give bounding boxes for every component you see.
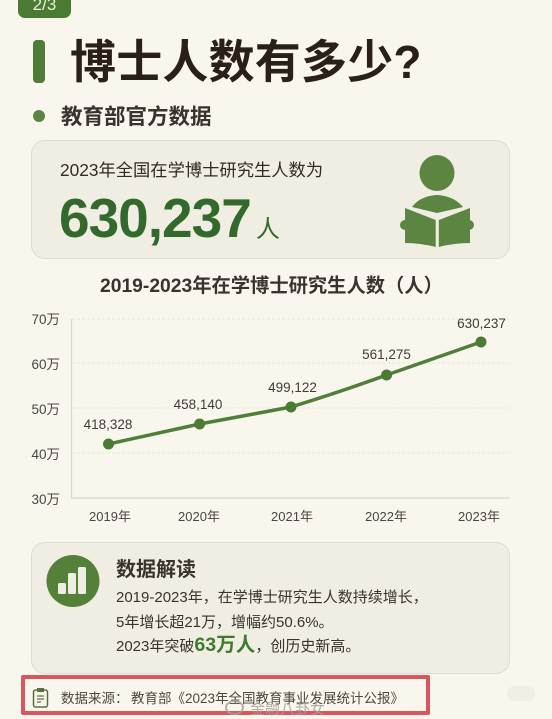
interpretation text — [116, 589, 428, 656]
y axis labels: 60万 — [31, 357, 60, 372]
x axis labels: 2023年 — [458, 509, 500, 524]
y axis labels: 70万 — [31, 312, 60, 327]
watermark: 金融八卦女 — [250, 701, 325, 718]
data labels: 418,328 — [84, 417, 132, 432]
y axis labels: 50万 — [31, 402, 60, 417]
icon: bar chart badge — [46, 555, 100, 607]
page badge — [18, 0, 71, 18]
data source: 教育部《2023年全国教育事业发展统计公报》 — [131, 691, 404, 706]
title accent bar — [33, 40, 45, 83]
data line — [108, 342, 481, 444]
y axis labels: 40万 — [31, 447, 60, 462]
data labels: 630,237 — [457, 316, 506, 331]
title: 博士人数有多少? — [70, 36, 422, 88]
data labels: 458,140 — [174, 397, 222, 412]
y axis labels: 30万 — [31, 492, 60, 507]
data labels — [84, 316, 506, 432]
interpretation heading: 数据解读 — [116, 559, 196, 581]
x axis labels — [89, 509, 500, 524]
interpretation text: 2023年突破63万人，创历史新高。 — [116, 634, 360, 656]
icon: person reading book — [400, 155, 474, 247]
x axis labels: 2021年 — [271, 509, 313, 524]
panel: headline figure — [31, 140, 510, 259]
x axis labels: 2019年 — [89, 509, 131, 524]
chart title: 2019-2023年在学博士研究生人数（人） — [100, 276, 443, 297]
y axis labels — [31, 312, 60, 507]
x axis labels: 2022年 — [365, 509, 407, 524]
small watermark pill — [507, 686, 535, 701]
source highlight box — [21, 675, 430, 715]
data source: 数据来源： — [61, 691, 128, 706]
section bullet — [33, 110, 45, 122]
data labels: 561,275 — [362, 347, 411, 362]
interpretation text: 2019-2023年，在学博士研究生人数持续增长， — [116, 589, 428, 606]
panel: data interpretation — [31, 542, 510, 674]
data labels: 499,122 — [268, 380, 317, 395]
x axis labels: 2020年 — [178, 509, 220, 524]
line chart — [31, 312, 509, 524]
data points — [103, 336, 486, 450]
headline number: 630,237人 — [59, 187, 280, 249]
icon: clipboard — [32, 688, 48, 708]
section heading: 教育部官方数据 — [61, 105, 212, 129]
headline label: 2023年全国在学博士研究生人数为 — [60, 160, 323, 180]
interpretation text: 5年增长超21万，增幅约50.6%。 — [116, 614, 334, 630]
